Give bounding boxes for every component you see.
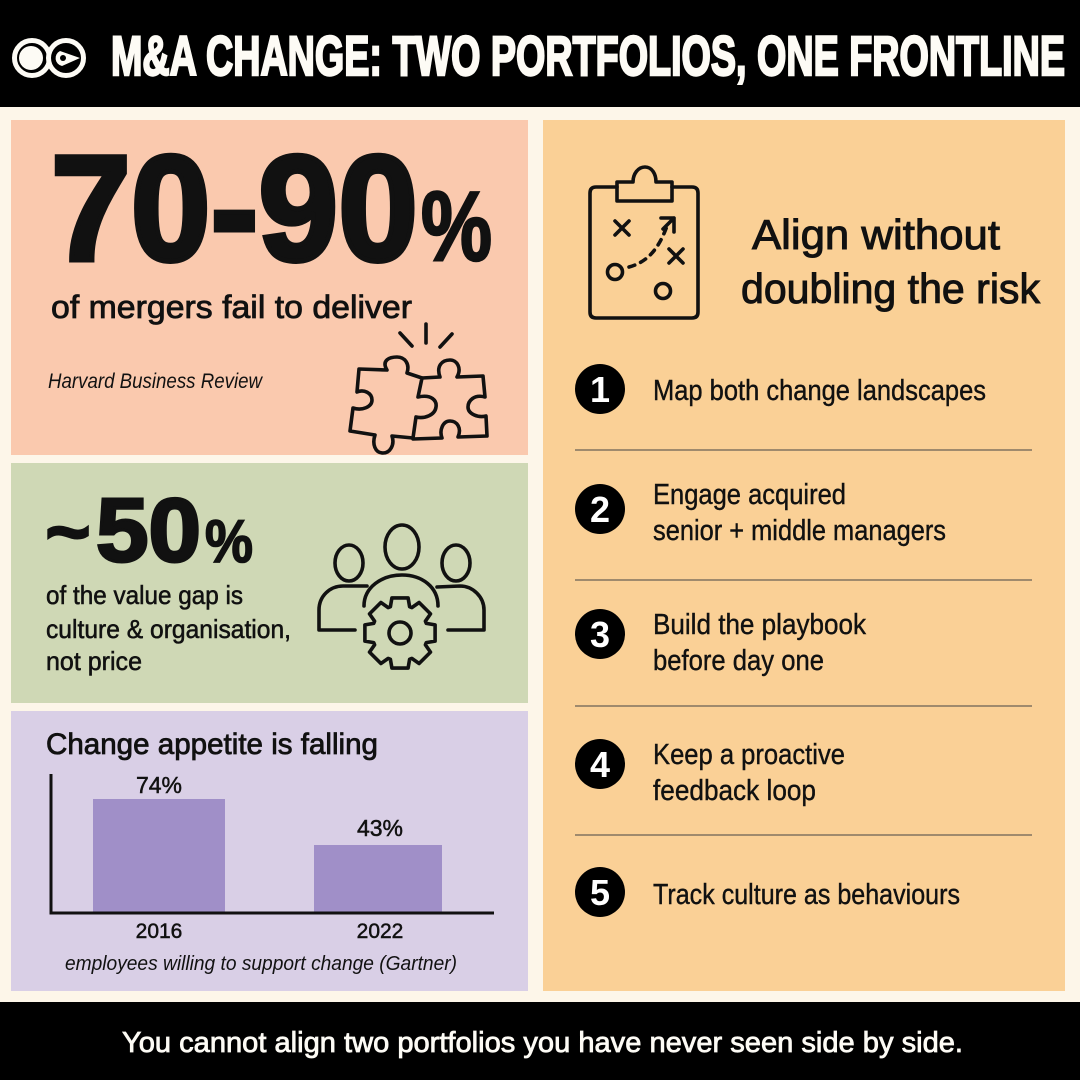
panel: value gap statistic	[11, 463, 528, 703]
icon: logo	[14, 40, 84, 76]
text: source: Harvard Business Review	[48, 370, 264, 393]
step 1: 1	[590, 369, 610, 410]
bar chart: 2016	[136, 920, 182, 943]
big stat: ~50%: ~	[46, 494, 90, 570]
panel heading: doubling the risk	[741, 265, 1041, 312]
bar chart: 74%	[136, 772, 182, 798]
step 5	[575, 867, 960, 917]
step 4	[575, 739, 845, 807]
step 3: 3	[590, 614, 610, 655]
text: value gap caption: culture & organisation,	[46, 614, 291, 644]
bar chart: 43%	[357, 815, 403, 841]
step 4: Keep a proactive	[653, 739, 845, 771]
panel heading	[741, 211, 1041, 312]
step 2: 2	[590, 489, 610, 530]
step 5: 5	[590, 872, 610, 913]
chart heading: Change appetite is falling	[46, 728, 378, 761]
big stat: ~50%: 50	[96, 481, 201, 581]
step 2: senior + middle managers	[653, 515, 946, 547]
step 5: Track culture as behaviours	[653, 879, 960, 911]
panel: change appetite chart	[11, 711, 528, 991]
step 3	[575, 609, 866, 677]
step 2	[575, 479, 946, 547]
text: value gap caption	[46, 580, 291, 676]
step 4: 4	[590, 744, 610, 785]
icon: puzzle pieces	[350, 324, 487, 453]
step 3: Build the playbook	[653, 609, 866, 641]
footer text: You cannot align two portfolios you have never seen side by side.	[122, 1027, 963, 1059]
text: value gap caption: of the value gap is	[46, 580, 243, 610]
step 1	[575, 364, 986, 414]
big stat: ~50%: %	[205, 508, 253, 575]
bar chart: 2022	[357, 920, 403, 943]
text: chart source: employees willing to support change (Gartner)	[65, 952, 457, 975]
icon: team with gear	[319, 525, 484, 668]
panel: merger failure statistic	[11, 120, 528, 455]
text: merger caption: of mergers fail to deliver	[51, 289, 412, 325]
header band	[0, 0, 1080, 107]
step 1: Map both change landscapes	[653, 375, 986, 407]
text: value gap caption: not price	[46, 646, 142, 676]
step 2: Engage acquired	[653, 479, 846, 511]
panel heading: Align without	[752, 211, 1000, 258]
panel: alignment steps	[543, 120, 1065, 991]
icon: playbook clipboard	[590, 167, 698, 318]
big stat: ~50%	[46, 481, 253, 581]
big stat: 70-90%: %	[421, 171, 492, 281]
footer band	[0, 1002, 1080, 1080]
step 4: feedback loop	[653, 775, 816, 807]
bar chart	[51, 772, 494, 943]
step 3: before day one	[653, 645, 824, 677]
big stat: 70-90%: 70-90	[51, 124, 418, 292]
